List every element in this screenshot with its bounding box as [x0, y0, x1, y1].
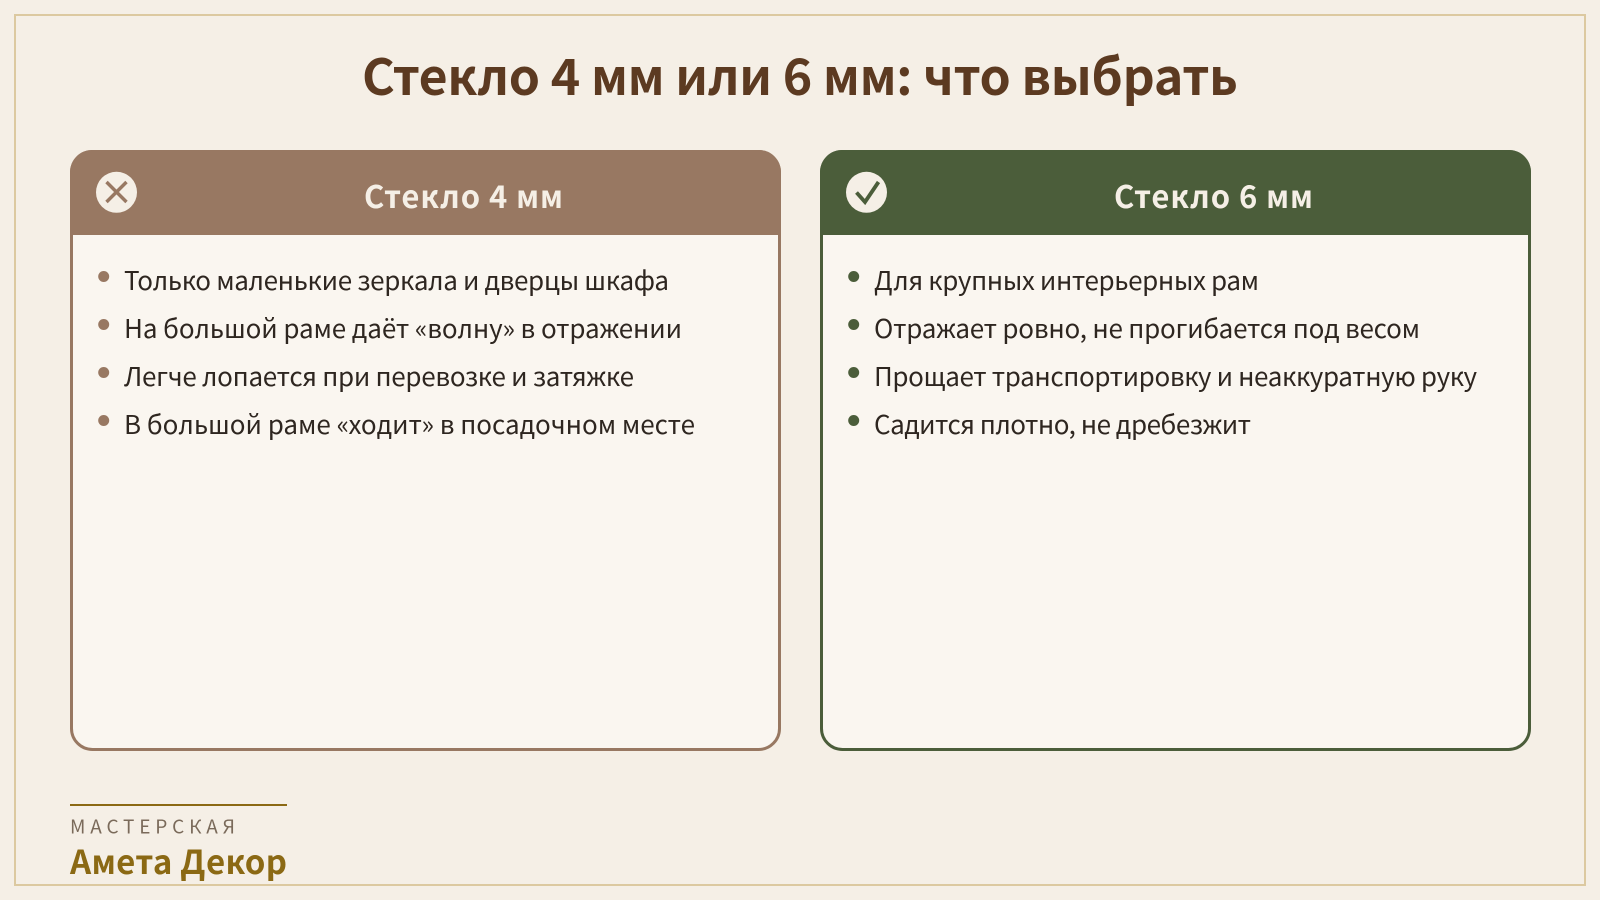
- list: 4 mm drawbacks: Легче лопается при перевозке и затяжке: [124, 357, 634, 394]
- list: 6 mm advantages: Садится плотно, не дребезжит: [874, 405, 1251, 442]
- list: 4 mm drawbacks: Только маленькие зеркала и дверцы шкафа: [124, 261, 669, 298]
- brand label: МАСТЕРСКАЯ: [70, 812, 235, 840]
- panel header: 4 mm: [70, 150, 781, 235]
- icon: check mark: [846, 172, 887, 213]
- title: Стекло 4 мм или 6 мм: что выбрать: [362, 38, 1238, 110]
- list: 6 mm advantages: Для крупных интерьерных рам: [874, 261, 1259, 298]
- list: 4 mm drawbacks: [98, 261, 695, 442]
- list: 6 mm advantages: [848, 261, 1477, 442]
- list: 4 mm drawbacks: На большой раме даёт «волну» в отражении: [124, 309, 682, 346]
- footer: workshop brand: [69, 804, 287, 884]
- panel heading: 4 mm: Стекло 4 мм: [364, 172, 563, 217]
- list: 4 mm drawbacks: В большой раме «ходит» в посадочном месте: [124, 405, 695, 442]
- panel heading: 6 mm: Стекло 6 мм: [1114, 172, 1313, 217]
- brand name: Амета Декор: [69, 836, 287, 884]
- icon: cross: [96, 172, 137, 213]
- list: 6 mm advantages: Прощает транспортировку и неаккуратную руку: [874, 357, 1477, 394]
- panel: 4 mm glass: [70, 150, 781, 750]
- panel header: 6 mm: [820, 150, 1531, 235]
- list: 6 mm advantages: Отражает ровно, не прогибается под весом: [874, 309, 1420, 346]
- panel: 6 mm glass: [820, 150, 1531, 750]
